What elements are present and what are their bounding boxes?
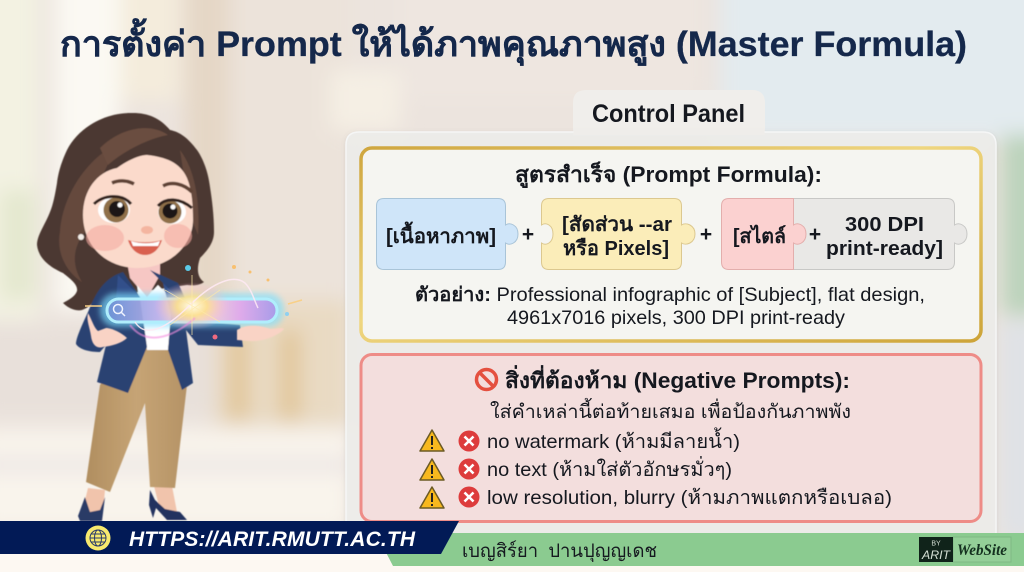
logo: ARIT website: BY [931,540,941,548]
list item: no watermark [420,427,740,453]
tab: control panel [573,90,765,136]
puzzle piece: ratio [542,198,695,270]
eyes [94,181,192,224]
plus sign: + [809,223,821,246]
puzzle piece: print-ready: print-ready] [826,238,943,260]
neck and blouse [127,262,172,350]
list item: no watermark: no watermark (ห้ามมีลายน้ำ) [487,427,740,453]
panel: negative prompts [361,354,981,522]
mouth and nose [128,226,162,255]
navy url band [0,521,459,554]
icon: prohibited [476,370,496,390]
puzzle piece: content: [เนื้อหาภาพ] [386,221,496,248]
heading: prompt formula: สูตรสำเร็จ (Prompt Formula): [515,160,822,189]
list item: no text: no text (ห้ามใส่ตัวอักษรมั่วๆ) [487,456,732,481]
subheading: ใส่คำเหล่านี้ต่อท้ายเสมอ เพื่อป้องกันภาพพัง [490,398,851,423]
navy url band: HTTPS://ARIT.RMUTT.AC.TH [129,528,416,551]
title: การตั้งค่า Prompt ให้ได้ภาพคุณภาพสูง (Master Formula) [60,18,967,66]
list item: no text [420,456,732,481]
face [78,155,193,268]
hands [87,313,284,347]
plus sign: + [522,223,534,246]
shoes and ankles [78,486,187,521]
hair [37,113,214,310]
earring [78,234,84,240]
puzzle piece: print-ready: 300 DPI [845,214,924,236]
logo: ARIT website [919,537,1011,562]
puzzle piece: content [376,198,518,270]
footer [0,521,1024,572]
puzzle piece: print-ready [793,198,967,270]
example text [415,284,925,329]
example text: ตัวอย่าง: Professional infographic of [Subject], flat design, [415,284,925,306]
logo: ARIT website: WebSite [957,542,1007,559]
glowing search bar [85,265,302,340]
character illustration [37,113,243,521]
green name band: เบญสิร์ยา ปานปุญญเดช [462,540,657,563]
plus sign: + [700,223,712,246]
puzzle piece: ratio: หรือ Pixels] [563,237,669,260]
logo: ARIT website: ARIT [921,548,952,562]
tab: control panel: Control Panel [592,100,745,128]
trousers [86,345,187,492]
example text: 4961x7016 pixels, 300 DPI print-ready [507,307,845,329]
list item: low resolution: low resolution, blurry (ห้ามภาพแตกหรือเบลอ) [487,487,892,509]
icon: globe [86,526,110,550]
puzzle piece: style: [สไตล์ [733,224,786,248]
puzzle piece: style [722,198,806,270]
puzzle piece: ratio: [สัดส่วน --ar [562,214,672,236]
blazer [76,270,243,393]
green name band [376,533,1024,566]
panel: prompt formula [361,148,981,341]
heading: negative prompts: สิ่งที่ต้องห้าม (Negative Prompts): [505,364,850,393]
panel: control panel [346,90,996,535]
